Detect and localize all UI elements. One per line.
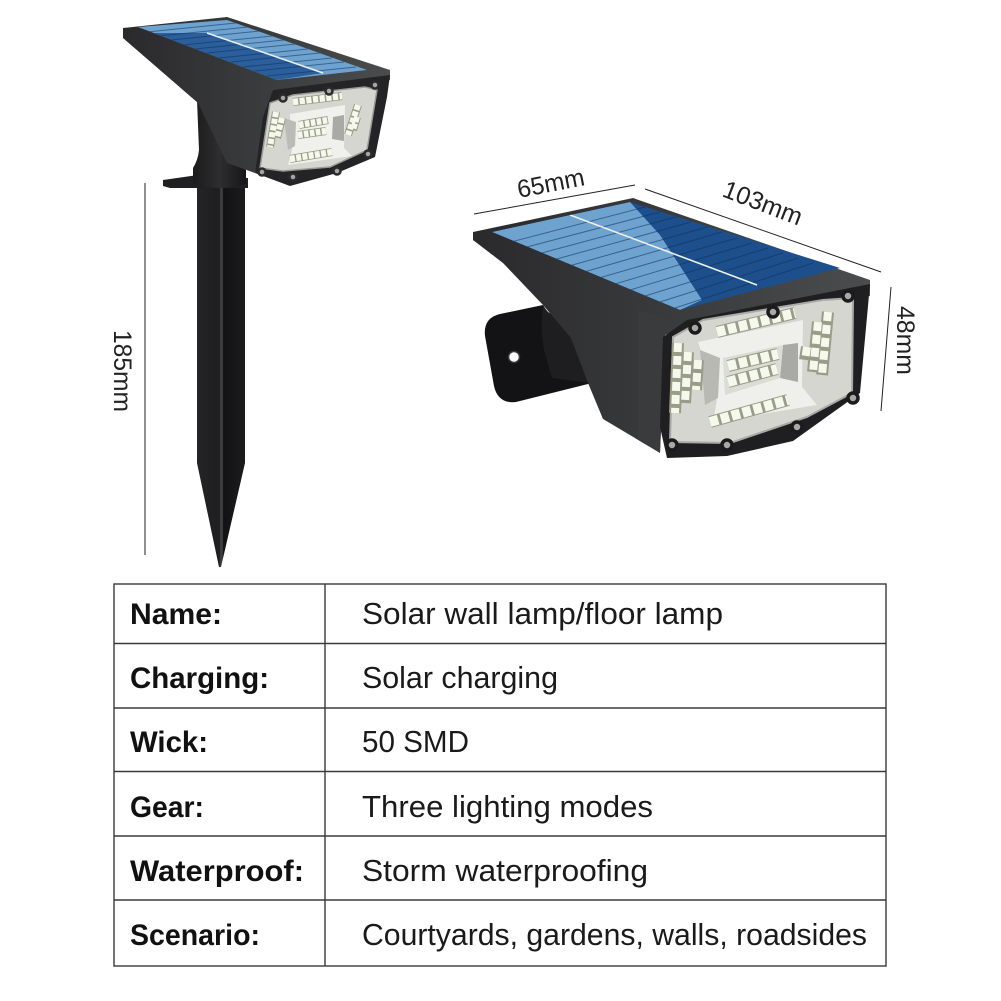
right lamp neck <box>542 306 590 383</box>
infographic canvas <box>113 17 915 967</box>
right lamp: wall-mounted unit <box>473 195 870 458</box>
row: waterproof: Waterproof: <box>130 855 304 888</box>
left lamp housing <box>123 17 390 173</box>
left lamp neck and collar <box>193 100 246 188</box>
row: charging <box>130 660 558 695</box>
row: charging: Charging: <box>130 662 269 695</box>
row: waterproof: Storm waterproofing <box>362 853 648 888</box>
row: wick: Wick: <box>130 726 208 759</box>
right lamp screws <box>667 291 858 450</box>
left lamp stake <box>197 188 245 567</box>
left lamp screws <box>258 82 378 180</box>
row: name: Solar wall lamp/floor lamp <box>362 596 723 631</box>
length dimension: 103mm: 103mm <box>719 175 806 231</box>
right lamp housing side crease <box>638 310 687 453</box>
row: waterproof <box>130 853 648 888</box>
length dimension: 103mm <box>645 175 881 272</box>
specification table <box>114 584 886 966</box>
row: scenario: Courtyards, gardens, walls, roadsides <box>362 917 867 952</box>
row: wick: 50 SMD <box>362 724 469 759</box>
width dimension: 65mm: 65mm <box>515 163 587 204</box>
row: gear <box>130 789 653 824</box>
left lamp solar panel <box>138 20 367 80</box>
right lamp LED board <box>670 298 853 443</box>
right lamp front face <box>660 284 870 458</box>
row: scenario: Scenario: <box>130 919 260 952</box>
height dimension: 185mm: 185mm <box>108 330 136 412</box>
right lamp housing <box>473 198 870 453</box>
table grid <box>114 584 886 966</box>
right lamp solar panel <box>492 202 840 310</box>
row: name <box>130 596 723 631</box>
left lamp front face <box>255 75 390 186</box>
width dimension: 65mm <box>474 163 635 214</box>
left lamp LEDs <box>270 96 358 159</box>
left lamp mounting plate <box>163 175 248 188</box>
row: name: Name: <box>130 598 222 631</box>
row: scenario <box>130 917 867 952</box>
right lamp bracket hole <box>508 352 520 362</box>
row: charging: Solar charging <box>362 660 558 695</box>
right lamp LEDs <box>675 312 828 422</box>
depth dimension: 48mm <box>881 287 919 411</box>
row: wick <box>130 724 469 759</box>
depth dimension: 48mm: 48mm <box>891 306 919 375</box>
left lamp LED board <box>260 87 377 171</box>
right lamp wall bracket <box>485 305 592 402</box>
row: gear: Three lighting modes <box>362 789 653 824</box>
row: gear: Gear: <box>130 791 204 824</box>
left lamp: stake-mounted unit <box>123 15 390 567</box>
